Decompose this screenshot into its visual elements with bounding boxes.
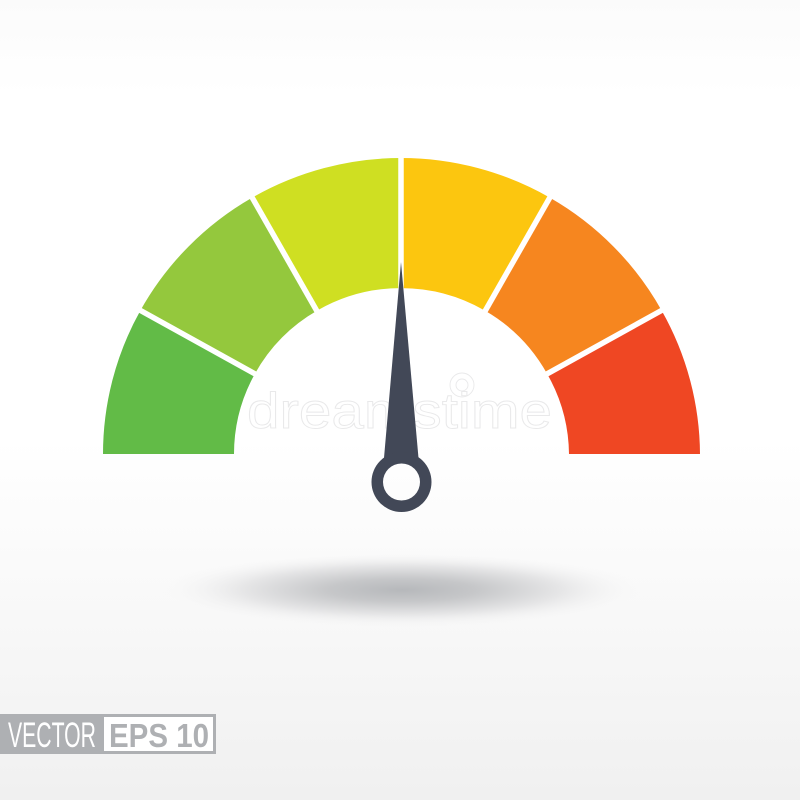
needle — [372, 262, 432, 512]
badge: vector eps 10: EPS 10 — [109, 717, 209, 754]
segment: orange — [484, 198, 662, 374]
watermark: dreamstime — [247, 383, 552, 439]
segment: red — [547, 310, 700, 454]
ground shadow — [157, 552, 647, 628]
gauge dial — [103, 152, 700, 454]
segment: yellow — [401, 158, 550, 310]
badge: vector eps 10: VECTOR — [8, 716, 96, 755]
segment: lime — [252, 158, 401, 310]
segment: green — [103, 310, 255, 454]
segment: light green — [140, 198, 318, 374]
badge: vector eps 10 — [0, 714, 216, 755]
